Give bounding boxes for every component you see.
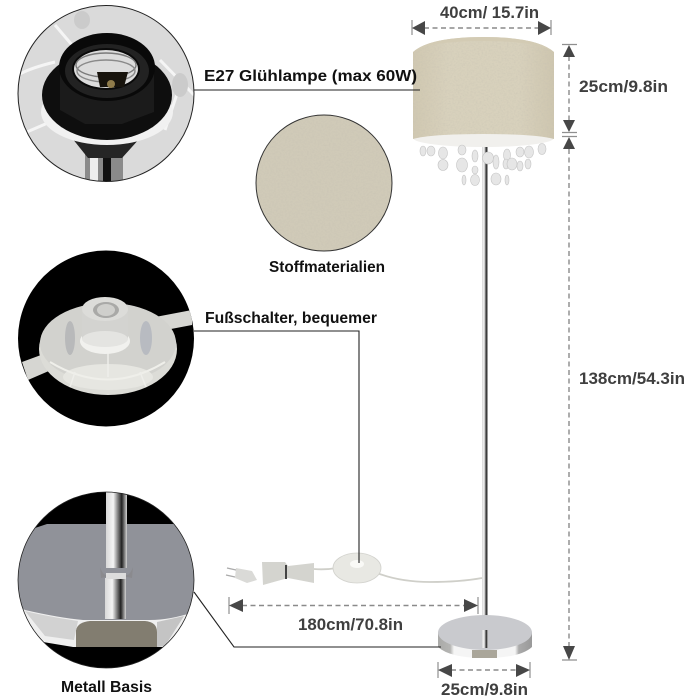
screw thread <box>72 48 140 90</box>
panel: fabric material circle <box>256 115 392 251</box>
chrome stem <box>85 154 123 181</box>
dimension: shade height: 25cm/9.8in <box>579 78 668 96</box>
leader: socket <box>194 89 420 91</box>
floor lamp <box>226 37 554 658</box>
plug <box>235 568 257 583</box>
dimension: cord length: 180cm/70.8in <box>298 616 403 634</box>
label: metal base: Metall Basis <box>61 679 152 696</box>
metal pole <box>106 492 127 568</box>
label: foot switch: Fußschalter, bequemer <box>205 310 377 327</box>
dimension: shade width <box>412 4 551 35</box>
dimension: shade width: 40cm/ 15.7in <box>440 4 539 22</box>
coiled cord bundle <box>262 562 314 585</box>
panel: lamp socket detail circle <box>18 5 194 184</box>
dimension: pole height <box>562 136 685 660</box>
neck <box>59 33 155 101</box>
cord stubs <box>158 310 192 329</box>
panel: foot switch detail circle <box>18 250 194 426</box>
leader: metal base <box>194 592 441 647</box>
crystal drops <box>420 144 546 186</box>
leader: foot switch <box>194 331 359 563</box>
lamp pole <box>482 140 488 648</box>
dimension: pole height: 138cm/54.3in <box>579 370 685 388</box>
black flange <box>42 64 172 140</box>
lamp shade underside <box>413 129 554 147</box>
dimension: cord length <box>229 597 478 634</box>
label: socket: E27 Glühlampe (max 60W) <box>204 68 417 85</box>
inline foot switch <box>333 553 381 583</box>
lamp base <box>438 632 532 658</box>
dimension: shade height <box>562 44 668 132</box>
white ring <box>41 104 173 145</box>
panel: metal base detail circle <box>18 492 194 668</box>
label: fabric: Stoffmaterialien <box>269 259 385 276</box>
dimension: base width: 25cm/9.8in <box>441 681 528 699</box>
power cord <box>377 573 482 582</box>
dimension: base width <box>438 662 530 699</box>
lamp shade <box>413 37 554 139</box>
